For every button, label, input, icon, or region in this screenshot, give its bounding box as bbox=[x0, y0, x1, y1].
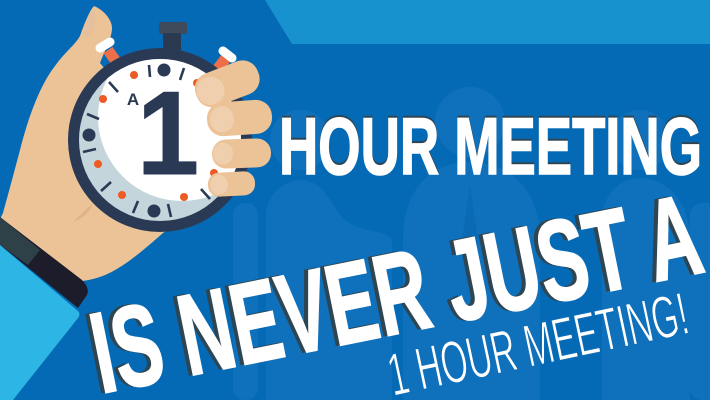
finger one bbox=[190, 56, 264, 112]
side buttons bbox=[108, 50, 117, 63]
case bbox=[68, 48, 252, 232]
main hand bbox=[0, 6, 215, 281]
orange dots bbox=[94, 71, 218, 201]
sleeve bbox=[0, 245, 80, 400]
finger three bbox=[212, 138, 272, 169]
hour dots bbox=[82, 64, 170, 218]
thumbnail bbox=[83, 8, 96, 37]
stopwatch bbox=[68, 22, 266, 232]
tick marks bbox=[83, 65, 210, 217]
finger two bbox=[206, 99, 273, 137]
background silhouettes of people bbox=[233, 87, 710, 400]
face bbox=[79, 59, 241, 221]
wristband bbox=[0, 217, 88, 308]
crown bbox=[159, 22, 187, 34]
fingers bbox=[190, 56, 273, 197]
hand and thumb bbox=[0, 6, 215, 281]
palm crease bbox=[73, 203, 93, 222]
finger four bbox=[207, 171, 256, 197]
letter A: A bbox=[127, 90, 139, 109]
top light-blue band bbox=[265, 0, 710, 44]
white highlight bbox=[98, 59, 241, 201]
numeral 1: 1 bbox=[137, 67, 199, 200]
